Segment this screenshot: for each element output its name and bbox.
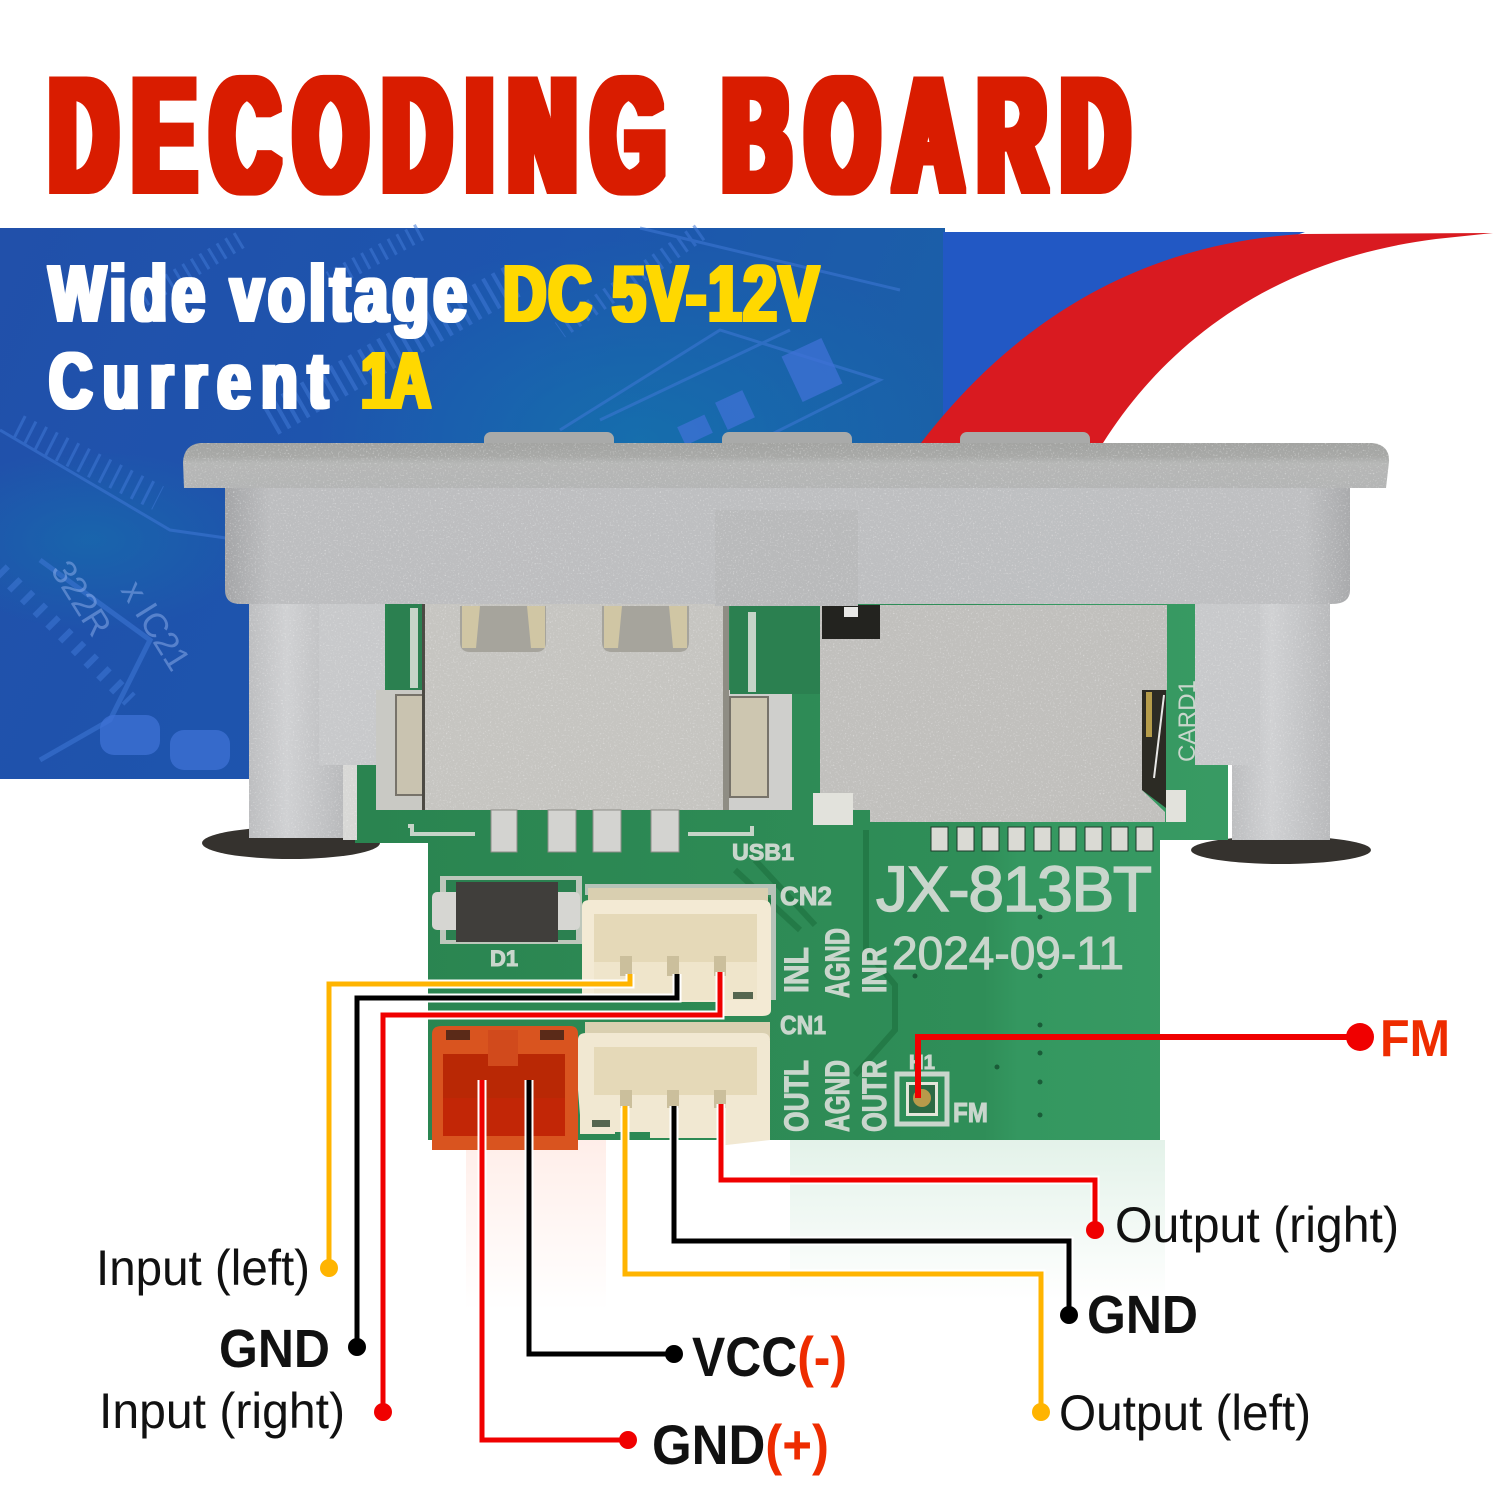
spec text: current: Current bbox=[49, 336, 328, 425]
board silkscreen labels: USB1 bbox=[732, 839, 794, 865]
wire: input right bbox=[374, 972, 720, 1421]
board silkscreen labels: OUTR bbox=[856, 1060, 894, 1132]
label: input GND: GND bbox=[219, 1319, 330, 1379]
red-orange power connector bbox=[432, 1026, 578, 1150]
banner background: circuit board bbox=[0, 228, 970, 779]
label: output left: Output (left) bbox=[1059, 1385, 1311, 1441]
label: output GND: GND bbox=[1087, 1285, 1198, 1345]
label: GND(+): GND(+) bbox=[652, 1413, 829, 1476]
board silkscreen labels: INL bbox=[778, 947, 816, 993]
board silkscreen labels: AGND bbox=[819, 1060, 857, 1132]
USB connector bbox=[376, 604, 820, 852]
board silkscreen labels: INR bbox=[856, 947, 894, 993]
mounting screw feet bbox=[202, 827, 1371, 864]
wire: output left bbox=[625, 1106, 1050, 1421]
SD card slot bbox=[813, 605, 1201, 851]
label: VCC(-): VCC(-) bbox=[692, 1325, 847, 1388]
upper white connector CN2 bbox=[582, 884, 776, 1016]
banner background: circuit board: x IC21 bbox=[113, 574, 198, 678]
spec text: current: 1A bbox=[361, 336, 431, 425]
board silkscreen labels: H1 bbox=[909, 1052, 935, 1074]
spec text: voltage: Wide voltage bbox=[49, 249, 467, 338]
board silkscreen labels: OUTL bbox=[778, 1060, 816, 1132]
label: FM: FM bbox=[1380, 1010, 1450, 1068]
wire: FM bbox=[918, 1023, 1374, 1098]
red swoosh bbox=[921, 233, 1493, 443]
product photo: decoding board bbox=[183, 432, 1389, 1310]
title: DECODING BOARD bbox=[50, 45, 1128, 225]
banner background: circuit board: 322R bbox=[43, 554, 119, 643]
board silkscreen labels: JX-813BT bbox=[876, 853, 1152, 925]
mounting posts bbox=[249, 600, 1330, 840]
buttons on top of the panel bbox=[484, 432, 1090, 452]
board silkscreen labels: CN1 bbox=[780, 1010, 826, 1040]
wire: input GND bbox=[348, 974, 677, 1356]
silver front panel bbox=[183, 443, 1389, 606]
blue banner right section bbox=[943, 232, 1305, 443]
wire: output GND bbox=[674, 1106, 1078, 1324]
SD card slot: CARD1 bbox=[1174, 680, 1201, 762]
wire: VCC bbox=[529, 1080, 683, 1363]
wire: output right bbox=[721, 1104, 1104, 1239]
board silkscreen labels: AGND bbox=[819, 928, 857, 998]
lower white connector CN1 bbox=[578, 1022, 770, 1146]
wire: input left bbox=[320, 974, 630, 1277]
spec text: voltage bbox=[49, 249, 819, 338]
board silkscreen labels: CN2 bbox=[780, 881, 832, 911]
diode D1 bbox=[432, 876, 582, 944]
wire: GND(+) bbox=[482, 1080, 637, 1449]
label: input left: Input (left) bbox=[96, 1240, 310, 1296]
spec text: voltage: DC 5V-12V bbox=[503, 249, 819, 338]
label: output right: Output (right) bbox=[1115, 1197, 1399, 1253]
board silkscreen labels: D1 bbox=[490, 946, 518, 971]
label: input right: Input (right) bbox=[99, 1383, 345, 1439]
board silkscreen labels: FM bbox=[953, 1097, 988, 1128]
board silkscreen labels: 2024-09-11 bbox=[892, 927, 1124, 979]
FM solder pad bbox=[897, 1074, 947, 1124]
board silkscreen labels bbox=[490, 839, 1152, 1132]
faded reflection of the board bbox=[466, 1140, 1165, 1310]
green circuit board bbox=[355, 604, 1228, 1140]
